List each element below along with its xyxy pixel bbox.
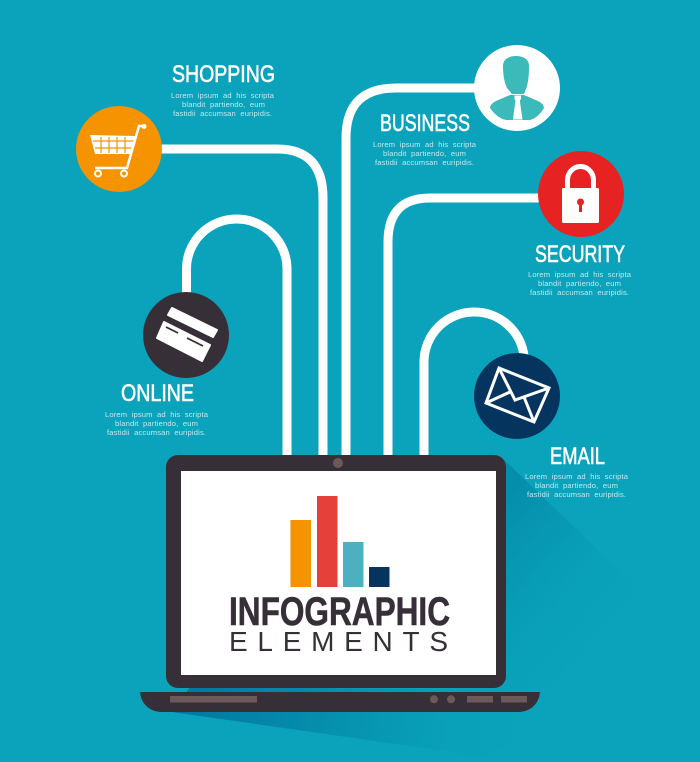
text: security description: Lorem ipsum ad his scripta	[528, 270, 632, 279]
heading: email: EMAIL	[550, 443, 605, 470]
text: shopping description: fastidii accumsan euripidis.	[173, 109, 272, 118]
panel: security	[528, 151, 632, 297]
text: shopping description: blandit partiendo, eum	[182, 100, 265, 109]
heading: security: SECURITY	[535, 241, 625, 268]
text: business description: blandit partiendo, eum	[383, 149, 466, 158]
bar chart	[290, 496, 390, 587]
laptop	[140, 455, 540, 712]
text: business description: Lorem ipsum ad his scripta	[373, 140, 477, 149]
text: security description: fastidii accumsan euripidis.	[530, 288, 629, 297]
text: online description: blandit partiendo, eum	[115, 419, 198, 428]
text: email description: fastidii accumsan euripidis.	[527, 490, 626, 499]
panel: email	[474, 353, 629, 499]
icon: credit card	[143, 292, 229, 378]
icon: shopping cart	[76, 106, 162, 192]
heading: online: ONLINE	[121, 380, 194, 407]
laptop lid	[166, 455, 506, 688]
connector: email	[424, 312, 524, 456]
icon: padlock	[538, 151, 624, 237]
text: email description	[525, 472, 629, 499]
subtitle: elements: ELEMENTS	[229, 626, 448, 657]
heading: shopping: SHOPPING	[172, 61, 275, 88]
connector: online	[186, 219, 287, 456]
laptop long shadow	[500, 456, 640, 700]
text: business description: fastidii accumsan euripidis.	[375, 158, 474, 167]
text: email description: Lorem ipsum ad his scripta	[525, 472, 629, 481]
laptop screen	[181, 471, 496, 675]
icon: businessman	[474, 45, 560, 131]
laptop base shadow	[172, 687, 560, 756]
laptop base details	[170, 695, 527, 703]
panel: business	[373, 45, 560, 167]
panel: shopping	[76, 61, 275, 192]
heading: business: BUSINESS	[380, 110, 470, 137]
panel: online	[105, 292, 229, 437]
text: online description	[105, 410, 209, 437]
connector: shopping	[160, 149, 323, 456]
text: security description	[528, 270, 632, 297]
icon: envelope	[474, 353, 560, 439]
text: shopping description	[171, 91, 275, 118]
connector: security	[388, 198, 540, 456]
laptop camera	[333, 458, 343, 468]
connector: business	[346, 88, 476, 456]
text: online description: Lorem ipsum ad his scripta	[105, 410, 209, 419]
text: email description: blandit partiendo, eum	[535, 481, 618, 490]
laptop base	[140, 692, 540, 712]
text: security description: blandit partiendo, eum	[538, 279, 621, 288]
text: online description: fastidii accumsan euripidis.	[107, 428, 206, 437]
text: shopping description: Lorem ipsum ad his scripta	[171, 91, 275, 100]
title: infographic: INFOGRAPHIC	[229, 590, 450, 634]
text: business description	[373, 140, 477, 167]
